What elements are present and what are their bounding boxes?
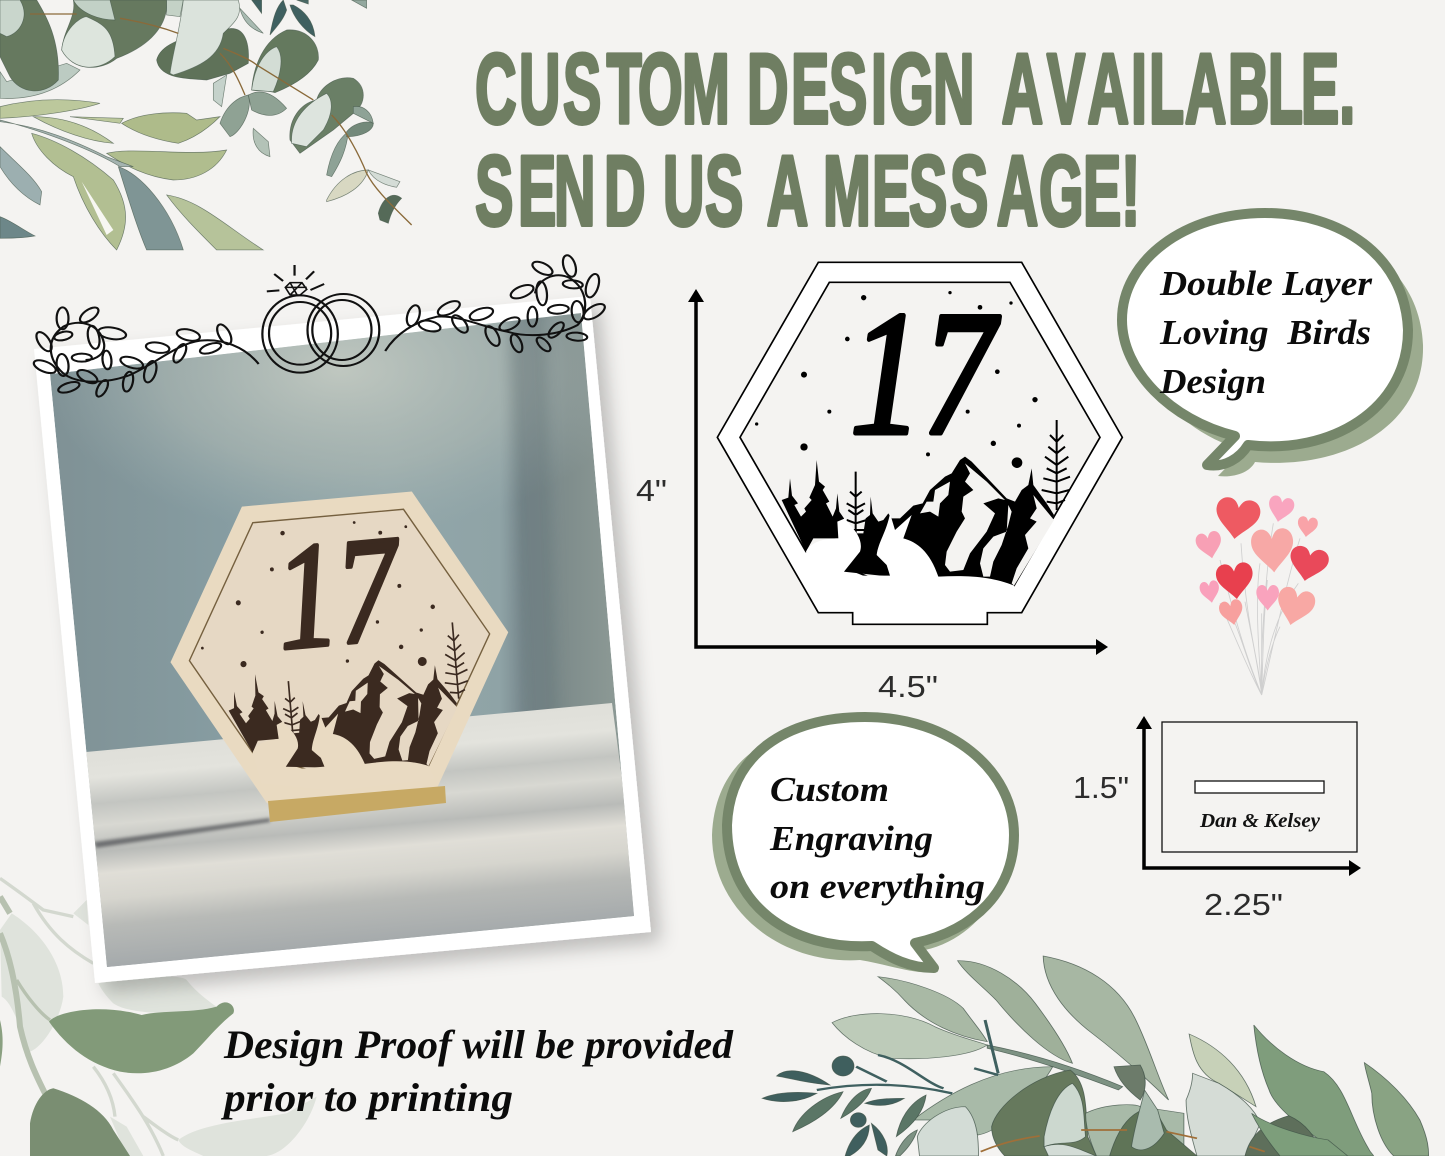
wood outer frame: [158, 484, 521, 811]
card axes: [1136, 716, 1361, 876]
hexagon line art: [717, 262, 1122, 624]
right vine: [385, 254, 608, 354]
decoration: top-left watercolor foliage: [0, 0, 412, 250]
title: CUSTOM DESIGN AVAILABLE.: [475, 35, 1355, 145]
chart: main hexagon dimension drawing: [636, 262, 1122, 704]
decoration: bottom-left pale foliage: [0, 878, 317, 1156]
panel: product photo in white tilted frame: [34, 296, 651, 983]
callout: double layer loving birds design: [1122, 213, 1423, 476]
label: height: 4": [636, 473, 667, 508]
decoration: bottom-right watercolor foliage: [762, 956, 1429, 1156]
dimension axes: [688, 289, 1108, 655]
callout: double layer loving birds design: Loving Birds: [1159, 313, 1371, 352]
card slot: [1195, 781, 1324, 793]
label: card height: 1.5": [1073, 770, 1129, 805]
title: SEND US A MESSAGE!: [475, 137, 1140, 247]
left vine: [32, 305, 259, 398]
callout: custom engraving on everything: [712, 717, 1014, 973]
icon: heart balloons: [1194, 494, 1331, 695]
card outline: [1162, 722, 1357, 852]
label: width: 4.5": [878, 669, 938, 704]
label: card width: 2.25": [1204, 887, 1283, 922]
callout: double layer loving birds design: Design: [1159, 362, 1266, 401]
text block: design proof note: [221, 1022, 734, 1120]
hexagon white outer frame: [717, 262, 1122, 624]
callout: double layer loving birds design: Double Layer: [1159, 264, 1372, 303]
wooden stand: [268, 786, 446, 822]
callout: custom engraving on everything: Custom: [770, 770, 889, 809]
icon: wedding rings with diamond and vines: [32, 254, 608, 398]
text block: design proof note: Design Proof will be provided: [223, 1022, 734, 1067]
callout: custom engraving on everything: Engraving: [769, 819, 933, 858]
title: [475, 35, 1355, 247]
wooden hexagon table number: [158, 484, 521, 822]
text block: design proof note: prior to printing: [221, 1075, 513, 1120]
engraved names: Dan & Kelsey: [1199, 810, 1320, 832]
number 17: 17: [850, 274, 1001, 472]
photo background: [40, 300, 640, 975]
chart: name card dimension drawing: [1073, 716, 1361, 922]
photo frame: [34, 296, 651, 983]
number 17 engraved: 17: [270, 504, 409, 682]
callout: custom engraving on everything: on everything: [770, 867, 985, 906]
rings: [262, 265, 379, 373]
